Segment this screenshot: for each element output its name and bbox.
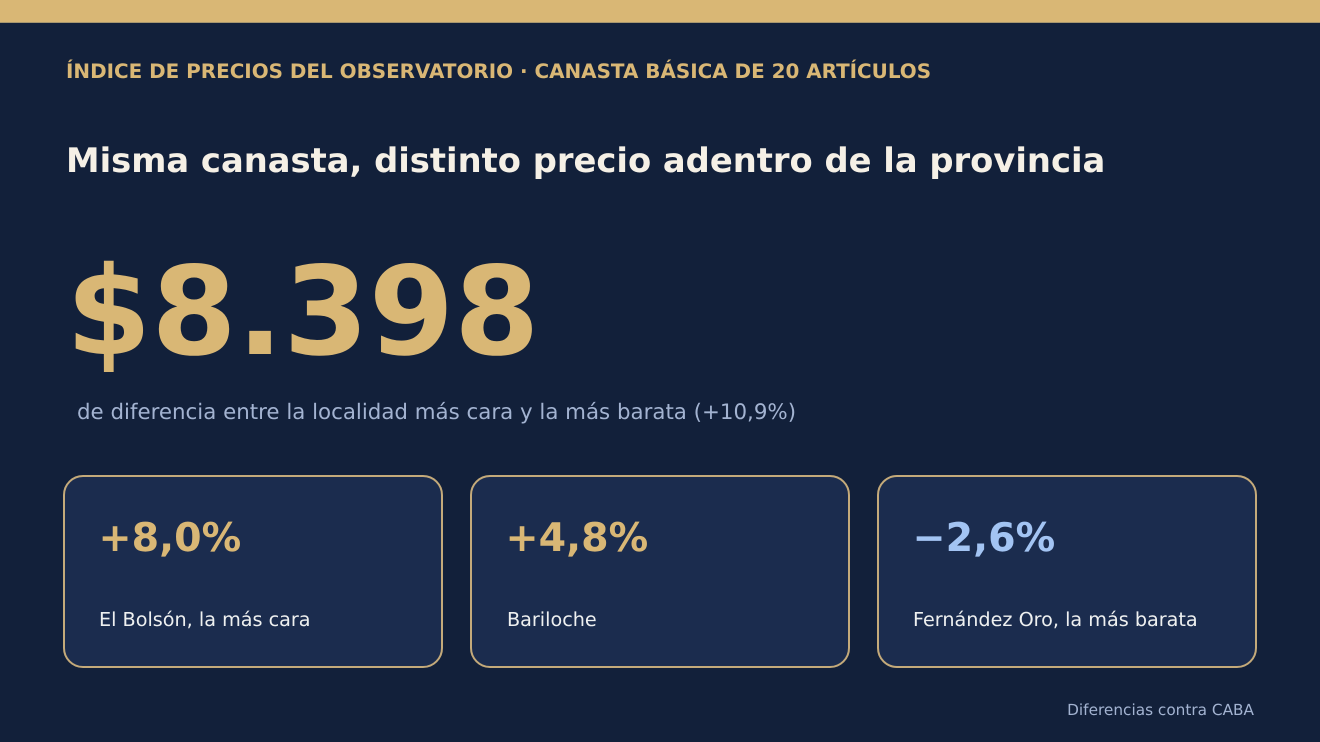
card value: −2,6%: −2,6% xyxy=(912,515,1055,561)
subtitle: de diferencia entre la localidad más cara y la más barata (+10,9%) xyxy=(77,400,796,425)
eyebrow heading: ÍNDICE DE PRECIOS DEL OBSERVATORIO · CANASTA BÁSICA DE 20 ARTÍCULOS xyxy=(66,60,931,83)
card value: +8,0%: +8,0% xyxy=(98,515,241,561)
footnote: Diferencias contra CABA xyxy=(1067,701,1254,719)
card label: Bariloche: Bariloche xyxy=(507,608,597,631)
card label: Fernández Oro: Fernández Oro, la más barata xyxy=(913,608,1198,631)
card: El Bolsón xyxy=(63,475,443,668)
card value: +4,8%: +4,8% xyxy=(506,515,648,561)
card label: El Bolsón: El Bolsón, la más cara xyxy=(99,608,311,631)
card: Fernández Oro xyxy=(877,475,1257,668)
big number: $8.398 xyxy=(66,240,539,383)
title: Misma canasta, distinto precio adentro de la provincia xyxy=(66,141,1105,180)
card: Bariloche xyxy=(470,475,850,668)
top accent bar xyxy=(0,0,1320,23)
